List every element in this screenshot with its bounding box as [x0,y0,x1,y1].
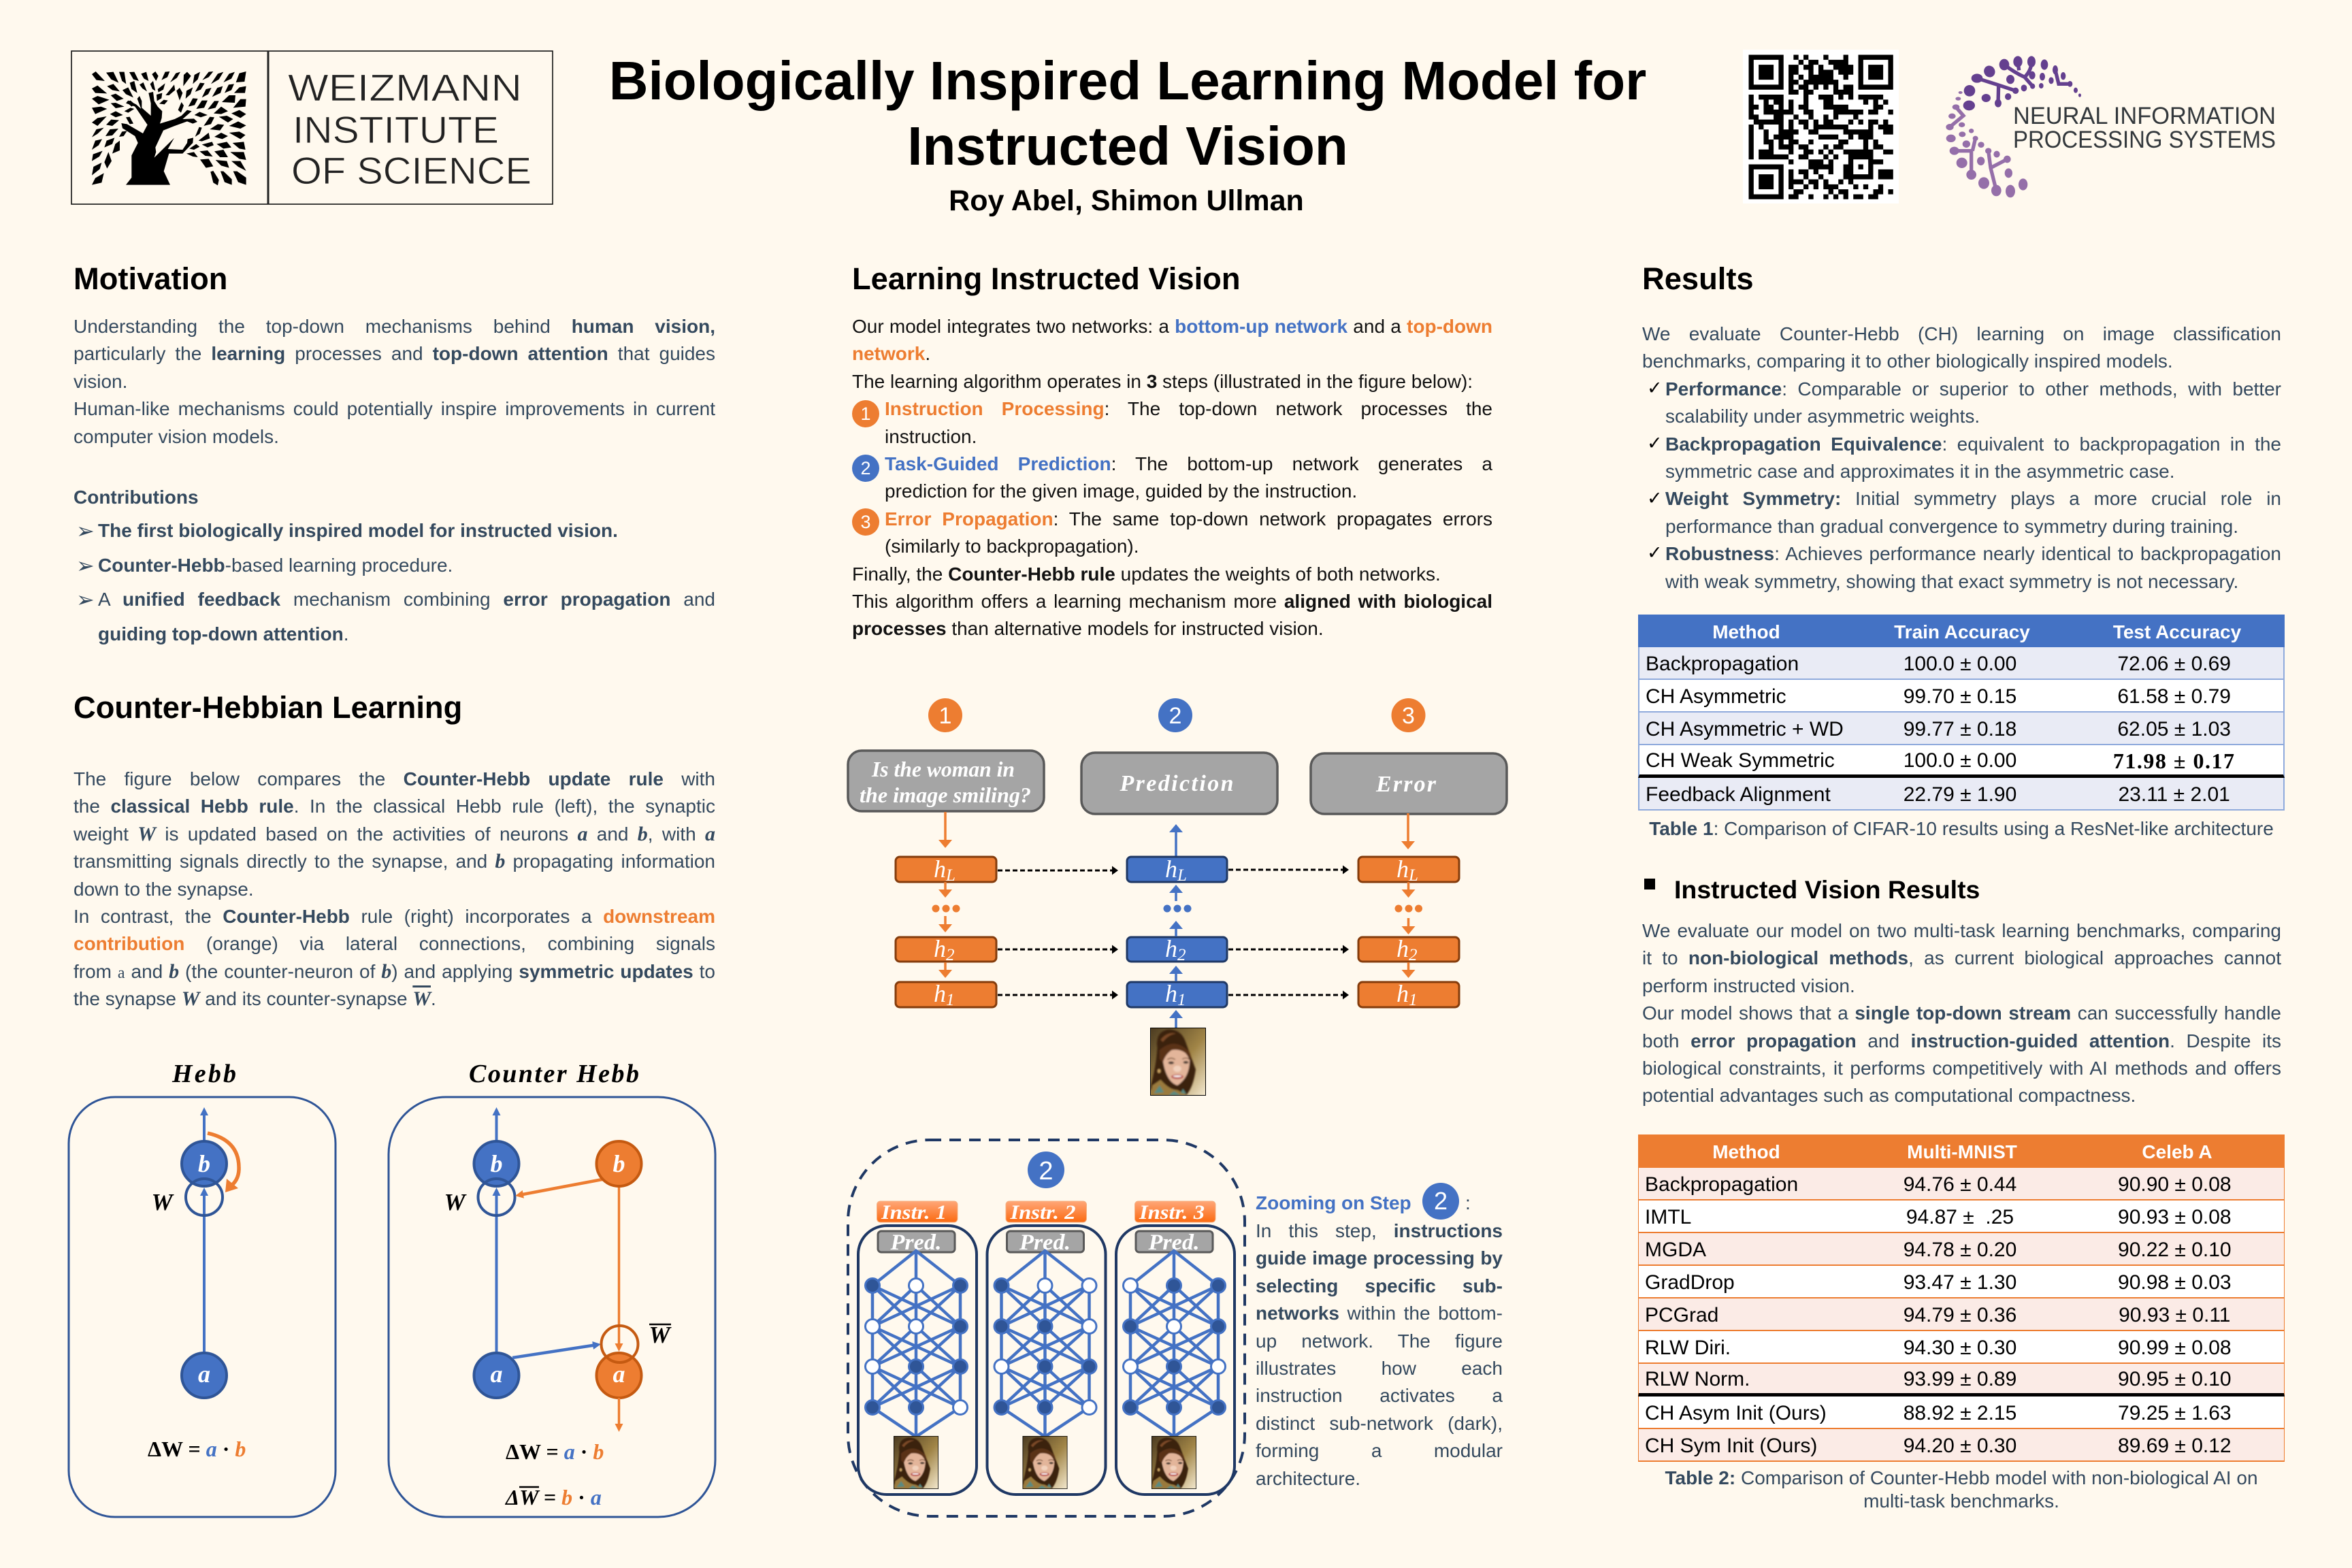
column: step 3: Error [1375,772,1437,797]
table 1: CIFAR-10 results: 22.79 ± 1.90 [1904,783,2016,806]
column: step 1: Is the woman in [871,757,1015,781]
logo: Weizmann Institute of Science [71,50,553,205]
text: learning instructed vision: The learning algorithm operates in 3 steps (illustrated in the figure below): [852,371,1473,392]
text: results intro and checklist: symmetric case and approximates it in the asymmetric case. [1665,461,2174,482]
column: step 2: Prediction [1119,771,1233,796]
panel: Counter Hebb: b [612,1150,625,1177]
column: step 3: 3 [1402,703,1415,729]
text: zooming on step 2: architecture. [1256,1468,1360,1489]
text: motivation [74,316,715,447]
table 1: CIFAR-10 results: 100.0 ± 0.00 [1904,652,2016,675]
text: instructed vision results: We evaluate our model on two multi-task learning benchmarks, comparing [1642,920,2281,941]
title: Instructed Vision [907,116,1348,176]
heading: zooming on step 2: : [1465,1192,1471,1213]
text: counter-hebbian description [74,768,715,1010]
column: step 1: h [934,935,946,962]
title [609,50,1646,176]
table 2: multi-task results: 90.95 ± 0.10 [2118,1368,2232,1390]
column: step 3: 1 [1409,991,1417,1009]
table 1: CIFAR-10 results: 71.98 ± 0.17 [2113,749,2235,773]
text: results intro and checklist: Backpropagation Equivalence: equivalent to backpropagation in the [1665,434,2281,455]
column: step 2: h [1165,980,1177,1007]
title: Biologically Inspired Learning Model for [609,50,1646,111]
table 2: multi-task results: 94.78 ± 0.20 [1904,1239,2016,1260]
list: contributions [76,519,715,644]
table 2: multi-task results: CH Sym Init (Ours) [1645,1435,1817,1456]
table 1: CIFAR-10 results: Backpropagation [1646,652,1799,675]
column: step 3: 2 [1409,946,1417,964]
panel: instruction 3: Instr. 3 [1139,1201,1205,1224]
table 1: CIFAR-10 results: CH Asymmetric [1646,685,1786,708]
heading: zooming on step 2: Zooming on Step [1256,1192,1411,1213]
table header: Multi-MNIST [1907,1141,2017,1162]
column: step 3: L [1408,866,1418,885]
panel: Hebb [69,1060,336,1517]
panel: instruction 1: Instr. 1 [881,1201,947,1224]
table 2: multi-task results: 90.99 ± 0.08 [2118,1337,2232,1358]
table 1: CIFAR-10 results [1638,615,2285,811]
text: learning instructed vision: (similarly to backpropagation). [885,536,1139,557]
column: step 1: 1 [946,991,954,1009]
table 2: multi-task results: 90.93 ± 0.11 [2119,1304,2231,1326]
panel: Counter Hebb: W [649,1322,672,1348]
icon: step 2: 2 [1039,1157,1054,1186]
icon: step 2: 2 [860,458,871,478]
text: counter-hebbian description: from a and b (the counter-neuron of b) and applying symmetric updates to [74,960,715,983]
panel: instruction 2: Instr. 2 [1009,1201,1075,1224]
column: step 2: h [1165,855,1177,883]
text: results intro and checklist: with weak symmetry, showing that exact symmetry is not necessary. [1665,571,2238,592]
column: step 2: 2 [1169,703,1181,729]
text: results intro and checklist: Weight Symmetry: Initial symmetry plays a more crucial role in [1665,488,2281,509]
text: contributions heading: Contributions [74,487,199,508]
table 1: CIFAR-10 results: 99.77 ± 0.18 [1904,717,2016,740]
table 2: multi-task results: Backpropagation [1645,1173,1798,1195]
table 2: multi-task results: 94.79 ± 0.36 [1904,1304,2016,1326]
text: counter-hebbian description: contribution (orange) via lateral connections, combining signals [74,933,715,954]
table 2: multi-task results: CH Asym Init (Ours) [1645,1402,1827,1424]
text: instructed vision results: biological constraints, it performs competitively with AI methods and offers [1642,1058,2281,1079]
panel: Hebb: a [198,1360,210,1388]
table 1: CIFAR-10 results: 72.06 ± 0.69 [2117,652,2231,675]
caption: table 2 [1665,1467,2258,1512]
column: step 2: 2 [1177,946,1186,964]
text: results intro and checklist: benchmarks, comparing it to other biologically inspired models. [1642,350,2173,372]
logo wordmark: WEIZMANN [288,66,522,109]
text: zooming on step 2: illustrates how each [1256,1358,1503,1379]
table header [1638,615,2285,647]
panel: instruction 3 [1116,1201,1235,1494]
text: counter-hebbian description: the classical Hebb rule. In the classical Hebb rule (left), the synaptic [74,796,715,817]
table 2: multi-task results: 90.98 ± 0.03 [2118,1271,2232,1293]
list: contributions: The first biologically inspired model for instructed vision. [98,520,618,541]
table 1: CIFAR-10 results: CH Asymmetric + WD [1646,717,1844,740]
column: step 1: 1 [939,703,951,729]
text: learning instructed vision: Instruction Processing: The top-down network processes the [885,398,1492,419]
text: learning instructed vision: instruction. [885,426,977,447]
column: step 3 [1311,698,1507,1009]
icon: check marks: ✓ [1647,542,1663,564]
heading: zooming on step 2: 2 [1434,1187,1448,1215]
column: step 1: h [934,980,946,1007]
icon: section bullet [1644,879,1655,889]
heading: Results: Results [1642,261,1754,296]
text: learning instructed vision: Error Propagation: The same top-down network propagates errors [885,508,1492,529]
caption: table 1: Table 1: Comparison of CIFAR-10 results using a ResNet-like architecture [1649,818,2274,839]
list: contributions: guiding top-down attention. [98,623,349,644]
table 2: multi-task results: 94.20 ± 0.30 [1904,1435,2016,1456]
logo wordmark: NEURAL INFORMATION [2013,102,2276,129]
list: contributions: Counter-Hebb-based learning procedure. [98,555,453,576]
text: instructed vision results: Our model shows that a single top-down stream can successfully handle [1642,1002,2281,1024]
icon: neural dots [1946,56,2081,197]
list: contributions: ➢ [76,519,95,543]
heading: Counter Hebb: Counter Hebb [469,1060,639,1088]
column: step 1: 2 [946,946,954,964]
text: zooming on step 2: In this step, instructions [1256,1220,1503,1241]
icon: step 3 [852,508,879,536]
icon: check marks [1647,378,1663,564]
table 2: multi-task results: MGDA [1645,1239,1706,1260]
table header [1638,1134,2285,1168]
text: instructed vision results [1642,920,2281,1106]
table 2: multi-task results: 90.90 ± 0.08 [2118,1173,2232,1195]
panel: instruction 1 [858,1201,977,1494]
formula: delta W: ΔW = a · b [506,1439,604,1464]
column: step 2 [1081,698,1277,1096]
icon: check marks: ✓ [1647,488,1663,509]
caption: table 2: multi-task benchmarks. [1863,1490,2059,1512]
column: step 2: 1 [1177,991,1186,1009]
text: zooming on step 2: forming a modular [1256,1440,1503,1461]
text: counter-hebbian description: the synapse W and its counter-synapse W. [74,987,436,1010]
table 1: CIFAR-10 results: 99.70 ± 0.15 [1904,685,2016,708]
table 2: multi-task results: 88.92 ± 2.15 [1904,1402,2016,1424]
icon: check marks: ✓ [1647,378,1663,399]
figure: Hebb vs Counter Hebb [68,1060,716,1518]
text: learning instructed vision: Finally, the Counter-Hebb rule updates the weights of both networks. [852,564,1441,585]
panel: Counter Hebb: b [490,1150,502,1177]
panel: Counter Hebb: W [444,1189,467,1215]
column: step 2: L [1177,866,1187,885]
icon: step 2 [852,455,879,482]
logo wordmark: OF SCIENCE [291,149,532,192]
text: motivation: vision. [74,371,127,392]
table 2: multi-task results: 94.76 ± 0.44 [1904,1173,2016,1195]
table 2: multi-task results: RLW Diri. [1645,1337,1731,1358]
caption: table 2: Table 2: Comparison of Counter-Hebb model with non-biological AI on [1665,1467,2258,1488]
logo: NeurIPS [1946,56,2276,197]
text: zooming on step 2: selecting specific sub- [1256,1275,1503,1296]
table 1: CIFAR-10 results: 100.0 ± 0.00 [1904,749,2016,772]
icon: step 3: 3 [860,512,871,532]
formula: Hebb: ΔW = a · b [148,1437,246,1461]
panel: instruction 2 [987,1201,1105,1494]
icon: step 1: 1 [860,404,871,424]
heading: Counter-Hebbian Learning: Counter-Hebbian Learning [74,690,462,725]
panel: Hebb: W [151,1189,174,1215]
text: motivation: Human-like mechanisms could potentially inspire improvements in current [74,398,715,419]
arrows: dashed lateral [998,870,1345,995]
table 2: multi-task results: 89.69 ± 0.12 [2118,1435,2232,1456]
panel: Counter Hebb: a [612,1360,625,1388]
text: zooming on step 2: distinct sub-network (dark), [1256,1413,1503,1434]
text: zooming on step 2: guide image processing by [1256,1247,1503,1269]
panel: instruction 3: Pred. [1147,1230,1199,1255]
table 2: multi-task results: 93.47 ± 1.30 [1904,1271,2016,1293]
logo wordmark: PROCESSING SYSTEMS [2013,126,2276,153]
text: results intro and checklist: Performance: Comparable or superior to other methods, with better [1665,378,2281,399]
table 1: CIFAR-10 results: 61.58 ± 0.79 [2117,685,2231,708]
logo wordmark [288,66,532,192]
text: learning instructed vision: prediction for the given image, guided by the instruction. [885,480,1357,502]
text: learning instructed vision: Task-Guided Prediction: The bottom-up network generates a [885,453,1492,474]
table header: Method [1712,1141,1780,1162]
panel: Counter Hebb [389,1060,715,1517]
logo wordmark: INSTITUTE [293,108,499,151]
figure: three-step flow [847,698,1508,1096]
table header: Celeb A [2142,1141,2212,1162]
text: instructed vision results: both error propagation and instruction-guided attention. Despite its [1642,1030,2281,1051]
table header: Method [1712,621,1780,642]
text: counter-hebbian description: transmitting signals directly to the synapse, and b propagating information [74,850,715,872]
panel: Hebb: b [198,1150,210,1177]
text: results intro and checklist: scalability under asymmetric weights. [1665,406,1980,427]
text: counter-hebbian description: down to the synapse. [74,879,254,900]
list: contributions: A unified feedback mechanism combining error propagation and [98,589,715,610]
text: motivation: Understanding the top-down mechanisms behind human vision, [74,316,715,337]
text: motivation: computer vision models. [74,426,279,447]
text: zooming on step 2: instruction activates a [1256,1385,1503,1406]
text: instructed vision results: perform instructed vision. [1642,975,1855,996]
table 1: CIFAR-10 results: 23.11 ± 2.01 [2118,783,2230,806]
text: learning instructed vision [852,316,1492,639]
figure: sub-networks per instruction [847,1139,1246,1518]
text: zooming on step 2: up network. The figure [1256,1330,1503,1352]
heading: Instructed Vision Results: Instructed Vision Results [1674,875,1980,904]
table 2: multi-task results: 90.22 ± 0.10 [2118,1239,2232,1260]
text: zooming on step 2 [1256,1220,1503,1489]
table 2: multi-task results: 94.30 ± 0.30 [1904,1337,2016,1358]
text: learning instructed vision: processes than alternative models for instructed vision. [852,618,1324,639]
heading: Learning Instructed Vision: Learning Instructed Vision [852,261,1241,296]
column: step 2: h [1165,935,1177,962]
table 2: multi-task results: RLW Norm. [1645,1368,1750,1390]
text: counter-hebbian description: In contrast, the Counter-Hebb rule (right) incorporates a downstream [74,906,715,927]
text: counter-hebbian description: weight W is updated based on the activities of neurons a and b, with a [74,823,715,845]
table 1: CIFAR-10 results: CH Weak Symmetric [1646,749,1835,772]
text: instructed vision results: it to non-biological methods, as current biological approaches cannot [1642,947,2281,968]
table header: Train Accuracy [1894,621,2030,642]
heading: zooming on step 2 [1256,1183,1471,1220]
text: instructed vision results: potential advantages such as computational compactness. [1642,1085,2136,1106]
column: step 1: the image smiling? [860,783,1031,807]
heading: Hebb: Hebb [172,1060,236,1088]
heading: Motivation: Motivation [74,261,227,296]
text: counter-hebbian description: The figure below compares the Counter-Hebb update rule with [74,768,715,789]
table 2: multi-task results: 90.93 ± 0.08 [2118,1206,2232,1228]
panel: instruction 1: Pred. [889,1230,942,1255]
table 1: CIFAR-10 results: Feedback Alignment [1646,783,1831,806]
icon: QR code [1743,50,1899,203]
panel: Counter Hebb: a [490,1360,502,1388]
column: step 3: h [1396,980,1409,1007]
text: learning instructed vision: network. [852,343,930,364]
text: learning instructed vision: This algorithm offers a learning mechanism more aligned with biological [852,591,1492,612]
table 2: multi-task results: PCGrad [1645,1304,1718,1326]
icon: step 1 [852,400,879,427]
column: step 3: h [1396,935,1409,962]
column: step 1 [848,698,1044,1009]
column: step 1: L [945,866,956,885]
icon: step 2 [1028,1152,1064,1188]
icon: check marks: ✓ [1647,433,1663,454]
table header: Test Accuracy [2113,621,2241,642]
column: step 3: h [1396,855,1409,883]
table 2: multi-task results: IMTL [1645,1206,1691,1228]
text: zooming on step 2: networks within the bottom- [1256,1303,1503,1324]
table 2: multi-task results: 79.25 ± 1.63 [2118,1402,2232,1424]
list: contributions: ➢ [76,553,95,578]
table 2: multi-task results: GradDrop [1645,1271,1735,1293]
list: contributions: ➢ [76,587,95,612]
table 2: multi-task results: 94.87 ± .25 [1906,1206,2014,1228]
text: results intro and checklist: We evaluate Counter-Hebb (CH) learning on image classification [1642,323,2281,344]
image: input photo [1150,1028,1206,1096]
table 1: CIFAR-10 results: 62.05 ± 1.03 [2117,717,2231,740]
table 2: multi-task results [1638,1134,2285,1462]
panel: instruction 2: Pred. [1019,1230,1071,1255]
logo wordmark [2013,102,2276,153]
column: step 1: h [934,855,946,883]
table 2: multi-task results: 93.99 ± 0.89 [1904,1368,2016,1390]
text: results intro and checklist: Robustness: Achieves performance nearly identical to backpropagation [1665,543,2281,564]
authors: Roy Abel, Shimon Ullman [949,184,1304,217]
text: results intro and checklist [1642,323,2281,592]
text: results intro and checklist: performance than gradual convergence to symmetry during training. [1665,516,2238,537]
formula: delta W bar: ΔW = b · a [504,1485,602,1509]
text: motivation: particularly the learning processes and top-down attention that guides [74,343,715,364]
icon: tree [92,71,246,185]
text: learning instructed vision: Our model integrates two networks: a bottom-up network and a top-down [852,316,1492,337]
